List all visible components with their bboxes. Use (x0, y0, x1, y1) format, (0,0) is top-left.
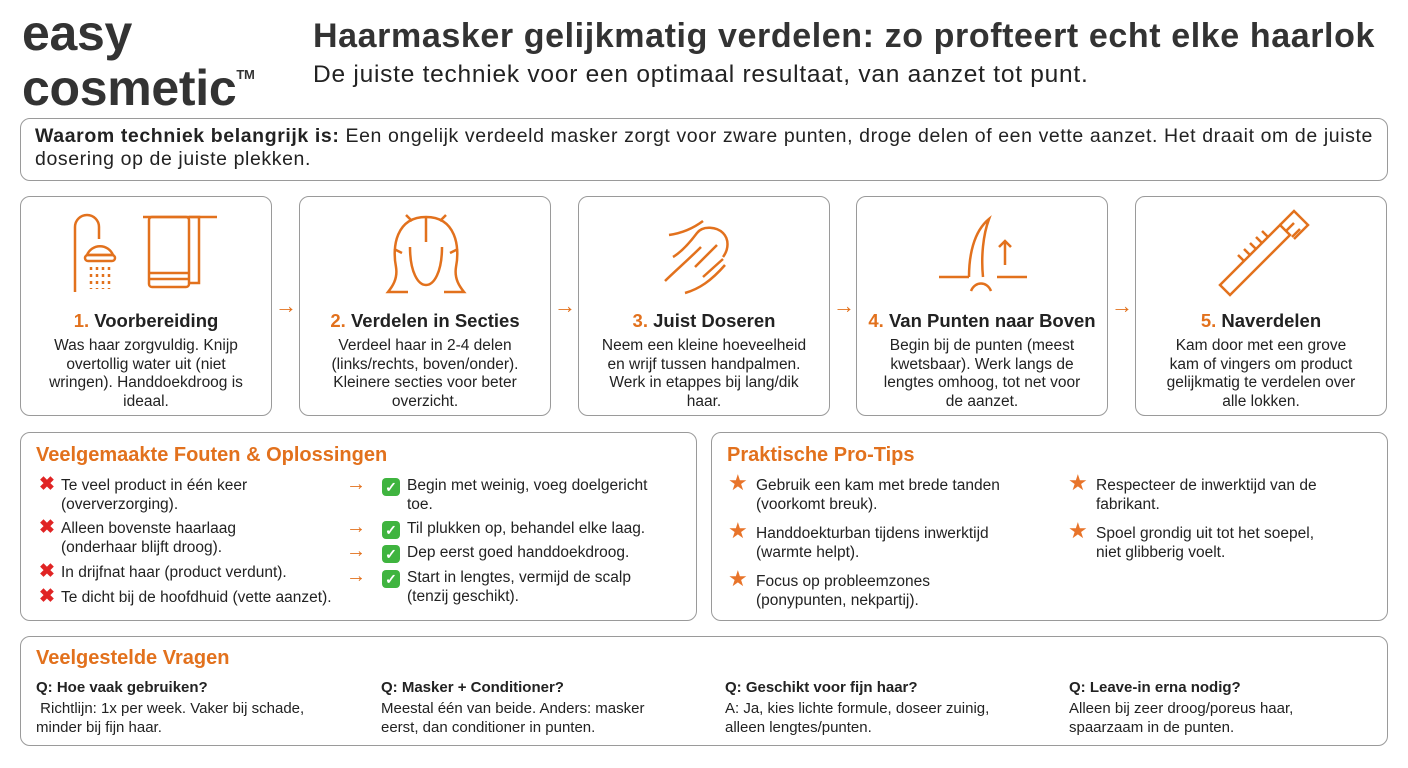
arrow: → (275, 293, 297, 318)
mistakes list: ✖ (39, 586, 55, 607)
logo: easy (22, 5, 132, 61)
icon: sectioned hair (386, 214, 466, 294)
mistakes list: ✓ (385, 546, 397, 562)
heading: Praktische Pro-Tips (727, 444, 914, 466)
card 3: 3. Juist Doseren (633, 310, 775, 331)
mistakes list: Te dicht bij de hoofdhuid (vette aanzet). (61, 589, 332, 606)
tips list: Respecteer de inwerktijd van de (1096, 477, 1317, 494)
panel: FAQ (20, 636, 1388, 746)
faq 3: Q: Geschikt voor fijn haar? (725, 679, 918, 696)
panel: mistakes (20, 432, 697, 621)
mistakes list: ✖ (39, 517, 55, 538)
tips list: ★ (1068, 518, 1088, 543)
heading: Veelgemaakte Fouten & Oplossingen (36, 444, 387, 466)
intro box (20, 118, 1388, 181)
tips list: (warmte helpt). (756, 544, 859, 560)
tips list: Spoel grondig uit tot het soepel, (1096, 525, 1314, 542)
card 5: 5. Naverdelen (1201, 310, 1321, 331)
mistakes list: (oververzorging). (61, 496, 178, 512)
faq 4: spaarzaam in de punten. (1069, 719, 1234, 736)
card 5 (1135, 196, 1387, 416)
mistakes list: Begin met weinig, voeg doelgericht (407, 477, 647, 494)
faq 2: eerst, dan conditioner in punten. (381, 719, 595, 736)
card 4: 4. Van Punten naar Boven (868, 310, 1096, 331)
faq 3: A: Ja, kies lichte formule, doseer zuinig, (725, 700, 989, 717)
tips list: niet glibberig voelt. (1096, 544, 1225, 560)
faq 1 (36, 679, 304, 736)
card 5: Kam door met een grove kam of vingers om product gelijkmatig te verdelen over alle lokken. (1167, 337, 1355, 410)
tips list: fabrikant. (1096, 496, 1160, 512)
tips list: (voorkomt breuk). (756, 496, 877, 512)
tips list: Handdoekturban tijdens inwerktijd (756, 525, 989, 542)
intro box: dosering op de juiste plekken. (35, 148, 311, 170)
logo (22, 5, 255, 116)
icon: hands (664, 220, 729, 294)
arrow: → (833, 293, 855, 318)
card 3: Neem een kleine hoeveelheid en wrijf tussen handpalmen. Werk in etappes bij lang/dik haar. (602, 337, 806, 410)
tips list: (ponypunten, nekpartij). (756, 592, 919, 608)
mistakes list: Dep eerst goed handdoekdroog. (407, 544, 629, 561)
card 1: 1. Voorbereiding (74, 310, 218, 331)
faq 4: Q: Leave-in erna nodig? (1069, 679, 1241, 696)
mistakes list: ✖ (39, 561, 55, 582)
icon: comb (1218, 209, 1310, 297)
mistakes list: toe. (407, 496, 433, 512)
card 2: 2. Verdelen in Secties (330, 310, 520, 331)
card 4 (856, 196, 1108, 416)
faq 1: Richtlijn: 1x per week. Vaker bij schade, (40, 700, 304, 717)
heading: Veelgestelde Vragen (36, 647, 229, 669)
faq 3: alleen lengtes/punten. (725, 719, 872, 736)
mistakes list: Te veel product in één keer (61, 477, 247, 494)
faq 1: minder bij fijn haar. (36, 719, 162, 736)
intro box: Waarom techniek belangrijk is: Een ongelijk verdeeld masker zorgt voor zware punten, droge delen of een vette aanzet. Het draait om de juiste (35, 125, 1373, 147)
card 4: Begin bij de punten (meest kwetsbaar). Werk langs de lengtes omhoog, tot net voor de aanzet. (884, 337, 1080, 410)
mistakes list (39, 473, 648, 607)
tips list (728, 470, 1317, 608)
faq 2: Q: Masker + Conditioner? (381, 679, 564, 696)
tips list: ★ (728, 470, 748, 495)
logo: cosmeticTM (22, 60, 255, 116)
faq 4 (1069, 679, 1293, 736)
mistakes list: Start in lengtes, vermijd de scalp (407, 569, 631, 586)
mistakes list: ✖ (39, 474, 55, 495)
faq 1: Q: Hoe vaak gebruiken? (36, 679, 208, 696)
faq 3 (725, 679, 989, 736)
tips list: Gebruik een kam met brede tanden (756, 477, 1000, 494)
tips list: ★ (1068, 470, 1088, 495)
subtitle: De juiste techniek voor een optimaal resultaat, van aanzet tot punt. (313, 61, 1089, 88)
faq 2: Meestal één van beide. Anders: masker (381, 700, 644, 717)
card 2 (299, 196, 551, 416)
faq 2 (381, 679, 644, 736)
card 3 (578, 196, 830, 416)
mistakes list: (onderhaar blijft droog). (61, 538, 222, 556)
arrow: → (1111, 293, 1133, 318)
mistakes list: → (346, 540, 366, 562)
card 1: Was haar zorgvuldig. Knijp overtollig water uit (niet wringen). Handdoekdroog is ideaal. (49, 337, 243, 410)
mistakes list: Alleen bovenste haarlaag (61, 520, 236, 537)
mistakes list: → (346, 565, 366, 587)
icon: shower and towel (74, 214, 217, 292)
arrow: → (554, 293, 576, 318)
mistakes list: ✓ (385, 479, 397, 495)
mistakes list: (tenzij geschikt). (407, 588, 519, 604)
panel: pro tips (711, 432, 1388, 621)
icon: hair strand (939, 215, 1027, 292)
tips list: ★ (728, 566, 748, 591)
tips list: ★ (728, 518, 748, 543)
card 2: Verdeel haar in 2-4 delen (links/rechts, boven/onder). Kleinere secties voor beter overzicht. (332, 337, 518, 410)
mistakes list: Til plukken op, behandel elke laag. (407, 520, 645, 537)
tips list: Focus op probleemzones (756, 573, 930, 590)
mistakes list: In drijfnat haar (product verdunt). (61, 564, 287, 581)
faq 4: Alleen bij zeer droog/poreus haar, (1069, 700, 1293, 717)
title: Haarmasker gelijkmatig verdelen: zo profteert echt elke haarlok (313, 17, 1375, 55)
mistakes list: → (346, 473, 366, 495)
mistakes list: ✓ (385, 522, 397, 538)
mistakes list: → (346, 516, 366, 538)
mistakes list: ✓ (385, 571, 397, 587)
card 1 (20, 196, 272, 416)
